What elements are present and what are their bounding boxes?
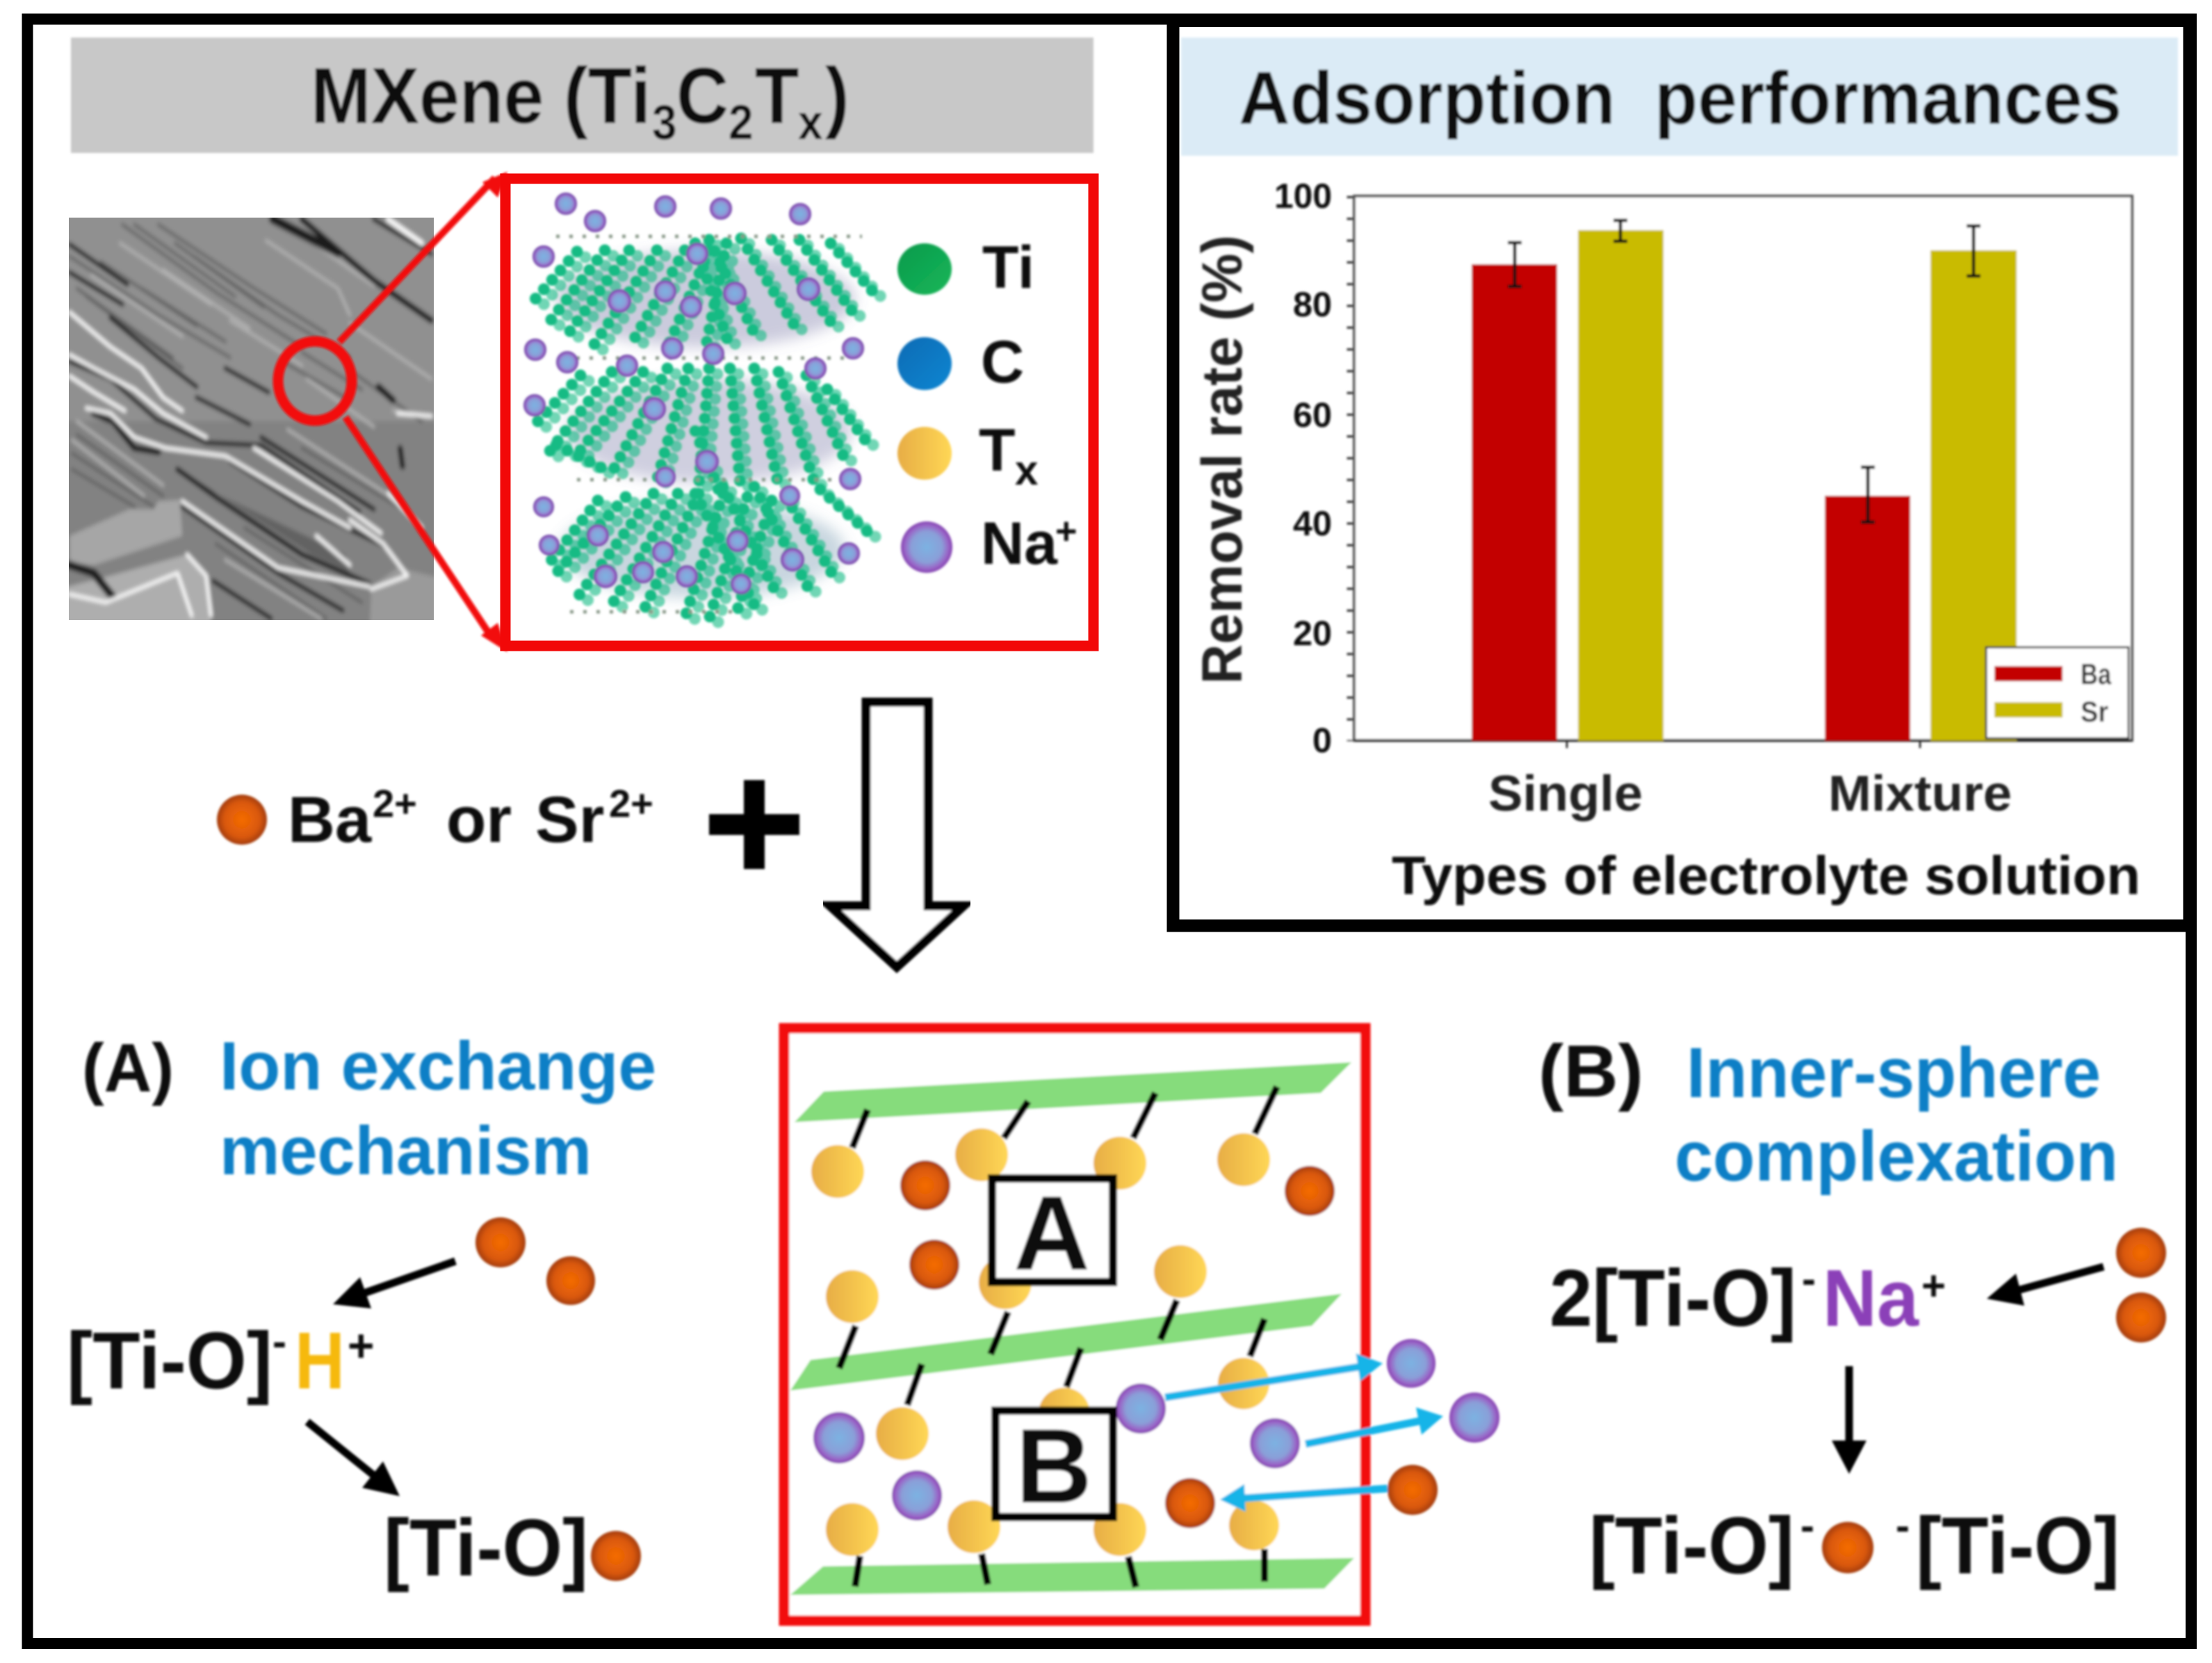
mechanism B: - (1896, 1502, 1910, 1549)
magnification callout (278, 172, 507, 652)
heading: MXene: x (798, 95, 823, 150)
panel: MXene structure (505, 179, 1093, 646)
barium or strontium ions (900, 1160, 1438, 1528)
heading: MXene: C (676, 51, 729, 140)
adsorbate label: 2+ (609, 781, 653, 825)
label box A: A (1014, 1174, 1090, 1292)
mechanism B: Na (1823, 1253, 1919, 1343)
mechanism B: + (1921, 1263, 1946, 1309)
adsorbate label: or (446, 783, 512, 856)
mechanism A: + (348, 1320, 375, 1371)
adsorbate label: Sr (535, 783, 604, 856)
hollow down arrow (830, 702, 963, 967)
legend: atoms (897, 234, 1077, 577)
bar chart: Mixture (1828, 766, 2012, 822)
x axis labels: Single (1488, 766, 1643, 822)
legend: atoms: Na (981, 510, 1058, 577)
label box A (992, 1174, 1113, 1292)
SEM micrograph (69, 218, 434, 620)
chart legend: Sr (2081, 695, 2108, 728)
mechanism B: 2[Ti-O] (1550, 1253, 1796, 1343)
mechanism A: [Ti-O] (67, 1315, 273, 1406)
mechanism B: complexation (1675, 1117, 2118, 1196)
green MXene sheets (790, 1062, 1354, 1595)
heading: MXene: ) (825, 51, 849, 140)
y axis labels: 60 (1293, 396, 1332, 435)
y axis labels: 80 (1293, 285, 1332, 324)
y axis title: Removal rate (%) (1191, 235, 1254, 684)
atomic structure (524, 193, 888, 624)
mechanism A (67, 1028, 656, 1593)
heading: MXene: 2 (729, 95, 754, 150)
Tx balls (811, 1128, 1279, 1556)
adsorbate label: Ba (288, 783, 372, 856)
heading: MXene: MXene (Ti (311, 51, 651, 140)
mechanism A: H (295, 1315, 345, 1406)
panel: interlayer schematic (784, 1028, 1499, 1621)
heading: adsorption: Adsorption performances (1239, 56, 2122, 140)
mechanism B: Inner-sphere (1686, 1033, 2101, 1112)
heading: MXene: 3 (652, 95, 677, 150)
mechanism B: (B) (1538, 1030, 1643, 1112)
adsorbate label: 2+ (373, 781, 417, 825)
label box B (995, 1407, 1113, 1525)
bar chart (1191, 177, 2140, 906)
legend: atoms: Ti (982, 234, 1034, 301)
y axis labels: 0 (1312, 721, 1332, 760)
mechanism B: - (1802, 1256, 1816, 1302)
exchange arrows (1165, 1354, 1443, 1512)
mechanism A: [Ti-O] (384, 1502, 588, 1593)
plus sign (709, 780, 799, 869)
bonds (839, 1087, 1277, 1587)
y axis labels (1274, 177, 1332, 760)
legend: atoms: + (1055, 510, 1077, 552)
mechanism A: Ion exchange (220, 1028, 656, 1104)
error bars (1508, 220, 1981, 522)
y axis labels: 20 (1293, 614, 1332, 653)
sodium ions (813, 1339, 1499, 1520)
x axis title: Types of electrolyte solution (1392, 845, 2140, 906)
legend: atoms: x (1015, 447, 1038, 494)
mechanism A: (A) (82, 1030, 174, 1106)
mechanism B: - (1800, 1502, 1814, 1549)
mechanism B: [Ti-O] (1916, 1500, 2120, 1591)
bars (1472, 230, 2017, 740)
mechanism A: mechanism (220, 1112, 592, 1189)
panel: adsorption performances (1173, 21, 2190, 926)
mechanism B (1538, 1030, 2166, 1591)
chart legend: Ba (2081, 658, 2112, 690)
mechanism B: [Ti-O] (1589, 1500, 1794, 1591)
legend: atoms: C (981, 329, 1024, 396)
mechanism A: - (273, 1318, 286, 1365)
chart legend (1986, 647, 2129, 738)
label box B: B (1016, 1407, 1092, 1525)
heading: adsorption (1181, 38, 2178, 156)
heading: MXene (71, 38, 1093, 153)
y axis labels: 40 (1293, 504, 1332, 543)
legend: atoms: T (979, 417, 1016, 484)
heading: MXene: T (755, 51, 799, 140)
adsorbate label (217, 781, 653, 856)
y axis labels: 100 (1274, 177, 1332, 216)
